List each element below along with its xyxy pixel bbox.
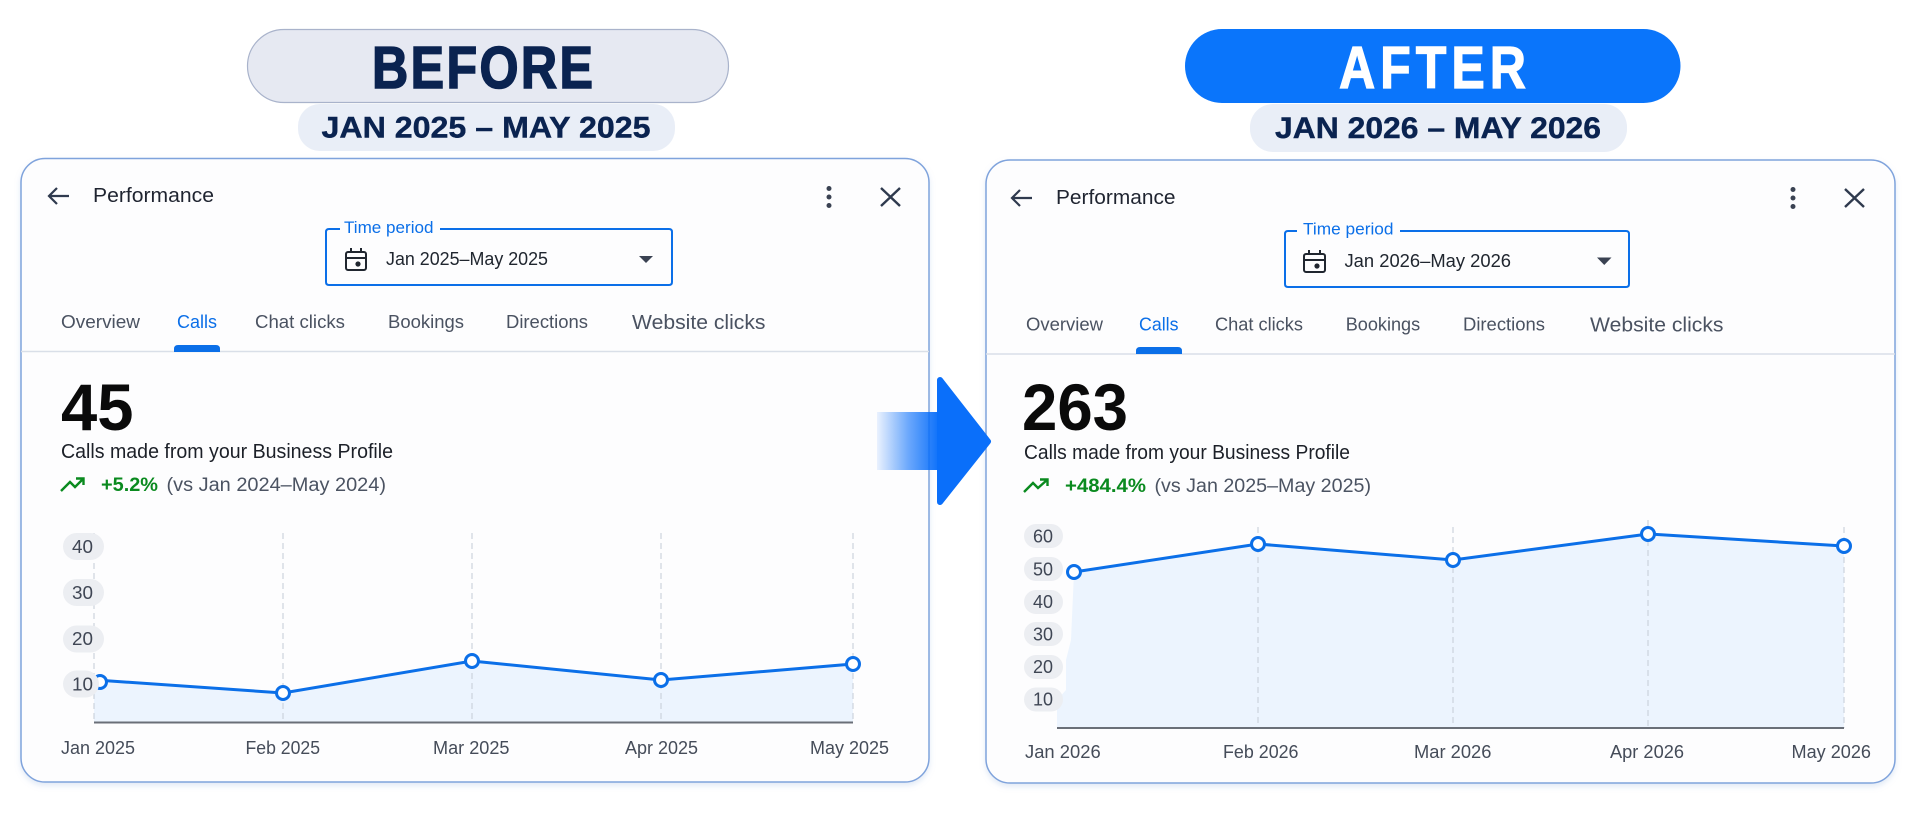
icon: calendar: [346, 248, 366, 270]
x axis labels: Apr 2026: [1610, 742, 1684, 762]
y axis labels: 50: [1033, 560, 1053, 580]
data line: [96, 661, 853, 693]
before heading pill: [248, 30, 728, 102]
x axis labels: Feb 2026: [1223, 742, 1298, 762]
trend line: (vs Jan 2025–May 2025): [1154, 476, 1371, 497]
big number 263: 263: [1022, 370, 1128, 444]
after heading pill: AFTER: [1339, 34, 1526, 101]
tabs: Directions: [506, 311, 588, 332]
card title: Performance: [1056, 187, 1176, 209]
x axis labels: Mar 2026: [1414, 742, 1491, 762]
icon: more menu: [826, 186, 832, 208]
y axis labels: 20: [1033, 657, 1053, 677]
icon: trend arrow: [1024, 480, 1048, 492]
y axis labels: [63, 533, 104, 698]
x axis labels: May 2025: [810, 738, 889, 758]
x axis labels: May 2026: [1792, 742, 1871, 762]
card title: Performance: [93, 185, 214, 207]
icon: trend arrow: [61, 478, 84, 491]
time period selector: [326, 219, 672, 285]
after date range pill: [1250, 104, 1627, 152]
metric description: Calls made from your Business Profile: [1024, 442, 1350, 464]
panel: before: [21, 30, 929, 782]
x axis labels: Feb 2025: [246, 738, 320, 758]
tabs: Bookings: [1346, 314, 1420, 334]
after performance card: [986, 160, 1895, 783]
line chart: after: [1024, 520, 1871, 762]
trend line: +484.4%: [1065, 476, 1146, 497]
icon: close: [1845, 189, 1864, 207]
before date range pill: [298, 104, 675, 151]
tabs: Website clicks: [632, 312, 766, 334]
after date range pill: JAN 2026 – MAY 2026: [1275, 112, 1601, 145]
tabs: Calls: [177, 311, 217, 332]
big number 45: 45: [61, 370, 134, 444]
tabs: Calls: [1139, 314, 1178, 334]
before date range pill: JAN 2025 – MAY 2025: [322, 112, 650, 144]
before heading pill: BEFORE: [372, 34, 593, 101]
y axis labels: 30: [72, 583, 93, 603]
time period selector: Time period: [1303, 220, 1394, 238]
trend line: (vs Jan 2024–May 2024): [166, 475, 386, 496]
icon: calendar: [1304, 250, 1325, 272]
x axis labels: Jan 2025: [61, 738, 135, 758]
tabs: Bookings: [388, 311, 464, 332]
y axis labels: 10: [72, 674, 93, 694]
tabs: Directions: [1463, 314, 1545, 334]
icon: back arrow: [49, 188, 69, 204]
after heading pill: [1185, 29, 1680, 103]
y axis labels: 30: [1033, 624, 1053, 644]
y axis labels: 20: [72, 629, 93, 649]
time period selector: [1285, 220, 1629, 287]
tabs: Overview: [1026, 314, 1104, 334]
tabs: Website clicks: [1590, 314, 1724, 336]
panel: after: [986, 29, 1895, 783]
x axis labels: [1025, 742, 1871, 762]
icon: more menu: [1790, 187, 1796, 209]
tabs: [986, 314, 1895, 354]
y axis labels: [1024, 524, 1063, 712]
trend line: [61, 475, 386, 496]
time period selector: Time period: [344, 219, 434, 237]
y axis labels: 60: [1033, 526, 1053, 546]
metric description: Calls made from your Business Profile: [61, 441, 393, 463]
arrow: before to after: [877, 380, 988, 502]
chart area fill: [94, 661, 853, 722]
before performance card: [21, 158, 929, 782]
x axis labels: [61, 738, 889, 758]
trend line: +5.2%: [101, 475, 158, 496]
y axis labels: 40: [72, 537, 93, 557]
icon: back arrow: [1012, 190, 1032, 206]
time period selector: Jan 2025–May 2025: [386, 248, 548, 269]
y axis labels: 40: [1033, 592, 1053, 612]
line chart: before: [61, 533, 889, 758]
tabs: [21, 311, 929, 352]
tabs: Overview: [61, 311, 141, 332]
icon: dropdown caret: [1597, 258, 1612, 265]
tabs: Chat clicks: [1215, 314, 1303, 334]
x axis labels: Jan 2026: [1025, 742, 1101, 762]
trend line: [1024, 476, 1371, 497]
data line: [1074, 534, 1844, 572]
icon: dropdown caret: [639, 256, 653, 263]
time period selector: Jan 2026–May 2026: [1344, 250, 1511, 271]
tabs: Chat clicks: [255, 311, 345, 332]
chart area fill: [1057, 534, 1844, 728]
x axis labels: Apr 2025: [625, 738, 698, 758]
icon: close: [881, 188, 900, 206]
y axis labels: 10: [1033, 690, 1053, 710]
x axis labels: Mar 2025: [433, 738, 510, 758]
